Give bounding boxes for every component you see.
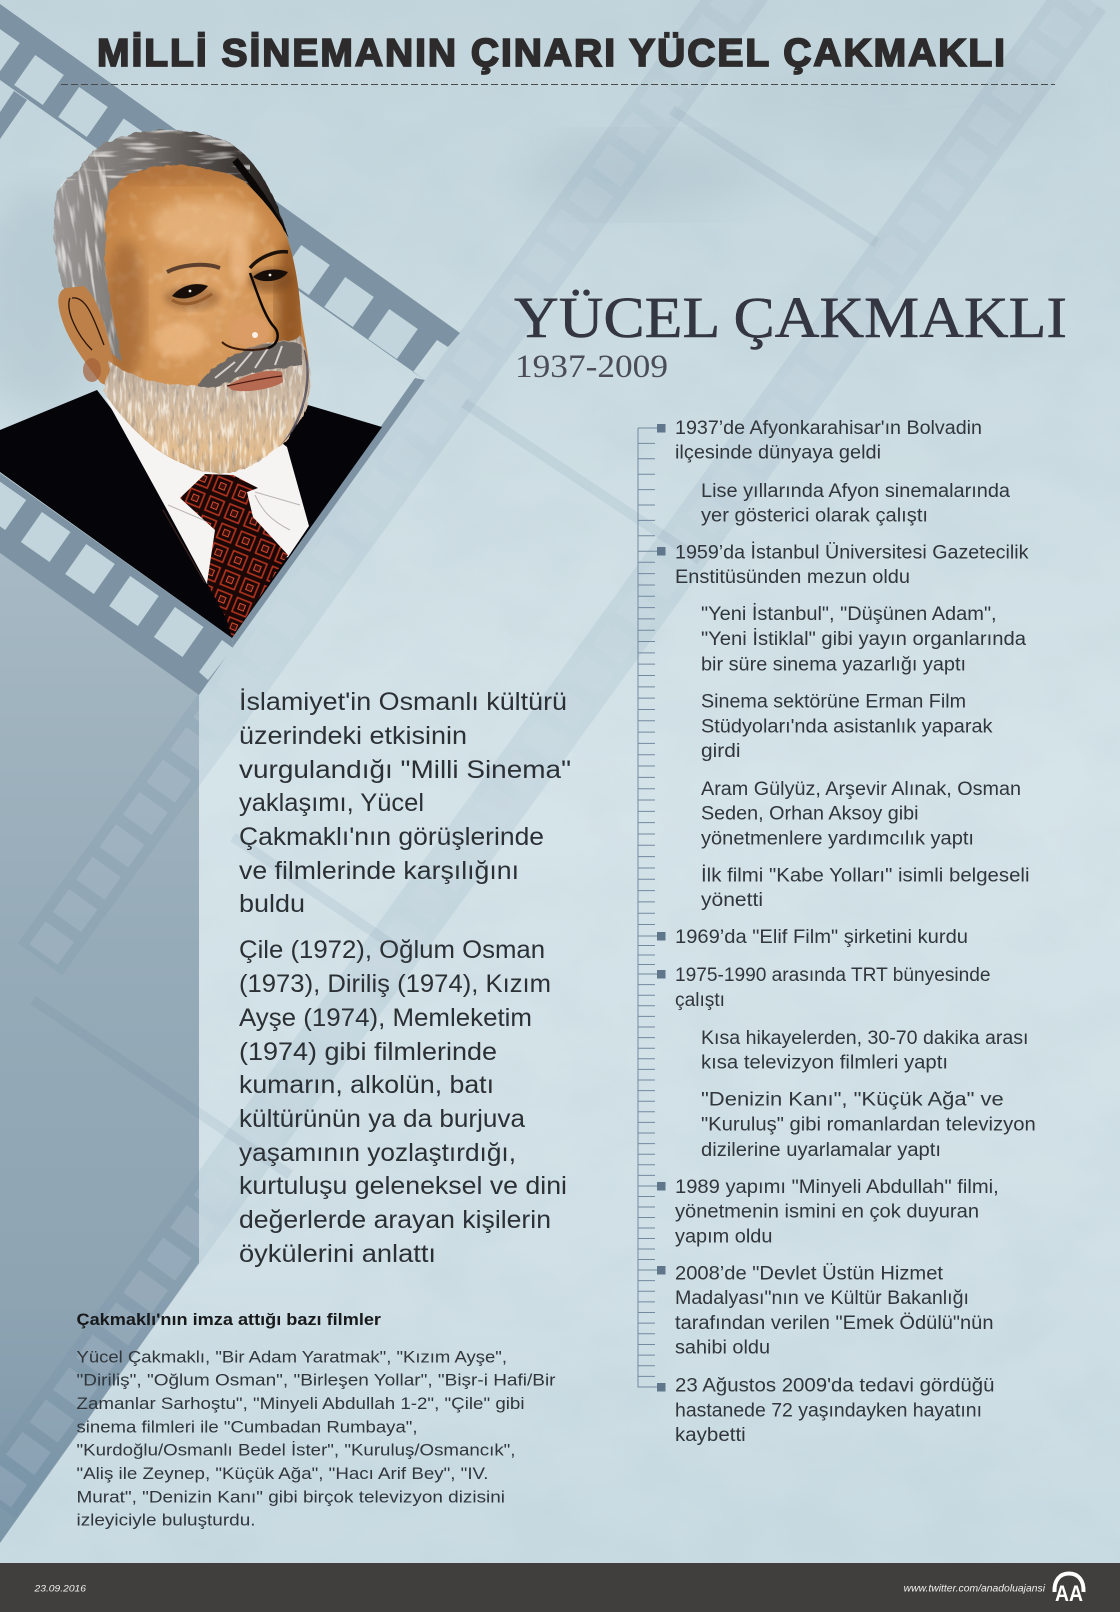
timeline text: sahibi oldu	[675, 1338, 770, 1358]
main text paragraph 2: yaşamının yozlaştırdığı,	[239, 1139, 516, 1167]
films block	[76, 1310, 556, 1530]
main text paragraph 2: (1974) gibi filmlerinde	[239, 1038, 497, 1066]
timeline text: Aram Gülyüz, Arşevir Alınak, Osman	[701, 779, 1021, 800]
eyebrows	[167, 265, 220, 272]
facial modelling	[105, 164, 302, 376]
eyes	[172, 284, 208, 298]
moustache	[197, 342, 302, 388]
main text paragraph 1: üzerindeki etkisinin	[239, 722, 467, 750]
timeline axis with ticks	[638, 428, 657, 1387]
timeline text: kaybetti	[675, 1425, 746, 1446]
timeline text: yönetti	[701, 890, 763, 911]
films text: Murat", "Denizin Kanı" gibi birçok televizyon dizisini	[76, 1487, 505, 1506]
main text paragraph 2: değerlerde arayan kişilerin	[239, 1206, 551, 1234]
main text paragraph 2: Çile (1972), Oğlum Osman	[239, 936, 545, 964]
timeline text: girdi	[701, 741, 740, 762]
films text: Zamanlar Sarhoştu", "Minyeli Abdullah 1-2", "Çile" gibi	[76, 1394, 524, 1413]
name and life dates: 1937-2009	[515, 349, 668, 385]
films text: "Diriliş", "Oğlum Osman", "Birleşen Yollar", "Bişr-i Hafi/Bir	[76, 1371, 556, 1390]
timeline text: İlk filmi "Kabe Yolları" isimli belgeseli	[701, 865, 1030, 886]
dark blue left panel	[0, 553, 199, 1543]
lower strip	[0, 473, 233, 695]
main text paragraph 2	[239, 936, 567, 1268]
timeline text: Seden, Orhan Aksoy gibi	[701, 804, 918, 825]
timeline text: hastanede 72 yaşındayken hayatını	[675, 1400, 982, 1421]
timeline text: 1989 yapımı "Minyeli Abdullah" filmi,	[675, 1177, 999, 1198]
timeline text: Kısa hikayelerden, 30-70 dakika arası	[701, 1028, 1028, 1049]
icon: Anadolu Agency logo: AA	[1055, 1581, 1083, 1606]
main text paragraph 1: Çakmaklı'nın görüşlerinde	[239, 823, 544, 851]
hair texture	[54, 130, 288, 362]
ear	[58, 286, 114, 385]
timeline text: yönetmenin ismini en çok duyuran	[675, 1202, 979, 1223]
main text paragraph 2: kültürünün ya da burjuva	[239, 1105, 525, 1133]
beard	[103, 335, 310, 473]
faint cross bands	[199, 106, 880, 1179]
timeline text: 1937’de Afyonkarahisar'ın Bolvadin	[675, 418, 982, 439]
timeline text: yapım oldu	[675, 1226, 772, 1247]
timeline text: Sinema sektörüne Erman Film	[701, 692, 966, 713]
films heading: Çakmaklı'nın imza attığı bazı filmler	[76, 1310, 381, 1329]
main text paragraph 1: yaklaşımı, Yücel	[239, 789, 424, 817]
title: MİLLİ SİNEMANIN ÇINARI YÜCEL ÇAKMAKLI	[97, 32, 1005, 75]
footer bar	[0, 1563, 1120, 1612]
nose	[229, 315, 271, 347]
suit jacket	[0, 390, 382, 638]
icon: Anadolu Agency logo	[1054, 1574, 1084, 1606]
timeline text: Madalyası"nın ve Kültür Bakanlığı	[675, 1288, 969, 1309]
main text paragraph 2: öykülerini anlattı	[239, 1240, 436, 1268]
timeline text	[675, 418, 1036, 1446]
main text paragraph 1: vurgulandığı "Milli Sinema"	[239, 756, 571, 784]
films text: izleyiciyle buluşturdu.	[76, 1511, 256, 1530]
strip holes	[0, 23, 418, 680]
shirt	[105, 397, 309, 584]
timeline text: "Yeni İstiklal" gibi yayın organlarında	[701, 629, 1026, 650]
timeline text: "Yeni İstanbul", "Düşünen Adam",	[701, 604, 997, 625]
hair	[54, 130, 288, 362]
upper left cross band	[0, 91, 27, 139]
films text: "Aliş ile Zeynep, "Küçük Ağa", "Hacı Arif Bey", "IV.	[76, 1464, 488, 1483]
films text: sinema filmleri ile "Cumbadan Rumbaya",	[76, 1417, 418, 1436]
timeline text: bir süre sinema yazarlığı yaptı	[701, 655, 966, 676]
timeline text: Lise yıllarında Afyon sinemalarında	[701, 481, 1010, 502]
main text paragraph 1: ve filmlerinde karşılığını	[239, 857, 519, 885]
right frame band	[232, 378, 425, 647]
timeline bullets	[657, 424, 666, 1392]
films text	[76, 1347, 556, 1530]
timeline text: dizilerine uyarlamalar yaptı	[701, 1140, 941, 1161]
timeline text: 2008’de "Devlet Üstün Hizmet	[675, 1264, 944, 1284]
main text paragraph 2: kumarın, alkolün, batı	[239, 1071, 494, 1099]
footer twitter address: www.twitter.com/anadoluajansi	[904, 1584, 1046, 1595]
timeline text: ilçesinde dünyaya geldi	[675, 443, 881, 464]
timeline text: "Denizin Kanı", "Küçük Ağa" ve	[701, 1090, 1004, 1111]
lips	[227, 371, 283, 391]
faint film strip A	[199, 0, 768, 786]
film strip frame around portrait	[0, 4, 460, 695]
films text: "Kurdoğlu/Osmanlı Bedel İster", "Kuruluş/Osmancık",	[76, 1441, 516, 1460]
timeline text: yönetmenlere yardımcılık yaptı	[701, 828, 974, 849]
footer date: 23.09.2016	[33, 1584, 87, 1595]
main text paragraph 1: buldu	[239, 890, 305, 918]
timeline text: 23 Ağustos 2009'da tedavi gördüğü	[675, 1376, 994, 1397]
main text paragraph 2: (1973), Diriliş (1974), Kızım	[239, 970, 551, 998]
head base	[60, 154, 310, 470]
main text paragraph 2: kurtuluşu geleneksel ve dini	[239, 1172, 567, 1200]
timeline text: 1969’da "Elif Film" şirketini kurdu	[675, 927, 968, 948]
films text: Yücel Çakmaklı, "Bir Adam Yaratmak", "Kızım Ayşe",	[76, 1347, 507, 1366]
timeline text: tarafından verilen "Emek Ödülü"nün	[675, 1313, 994, 1334]
name and life dates	[514, 285, 1067, 385]
main text paragraph 1	[239, 687, 571, 918]
beard texture	[100, 335, 315, 475]
portrait of Yücel Çakmaklı	[0, 122, 382, 638]
name and life dates: YÜCEL ÇAKMAKLI	[514, 285, 1067, 350]
main text paragraph 2: Ayşe (1974), Memleketim	[239, 1004, 532, 1032]
upper strip	[0, 4, 460, 380]
timeline text: Stüdyoları'nda asistanlık yaparak	[701, 716, 993, 737]
timeline text: kısa televizyon filmleri yaptı	[701, 1053, 948, 1074]
timeline text: 1975-1990 arasında TRT bünyesinde	[675, 965, 990, 986]
timeline text: 1959’da İstanbul Üniversitesi Gazetecilik	[675, 542, 1029, 564]
dashed title divider	[61, 84, 1055, 86]
timeline text: çalıştı	[675, 990, 725, 1011]
timeline text: yer gösterici olarak çalıştı	[701, 505, 928, 526]
main text paragraph 1: İslamiyet'in Osmanlı kültürü	[239, 687, 567, 716]
tie	[180, 474, 288, 638]
timeline text: Enstitüsünden mezun oldu	[675, 567, 910, 588]
timeline text: "Kuruluş" gibi romanlardan televizyon	[701, 1114, 1036, 1135]
